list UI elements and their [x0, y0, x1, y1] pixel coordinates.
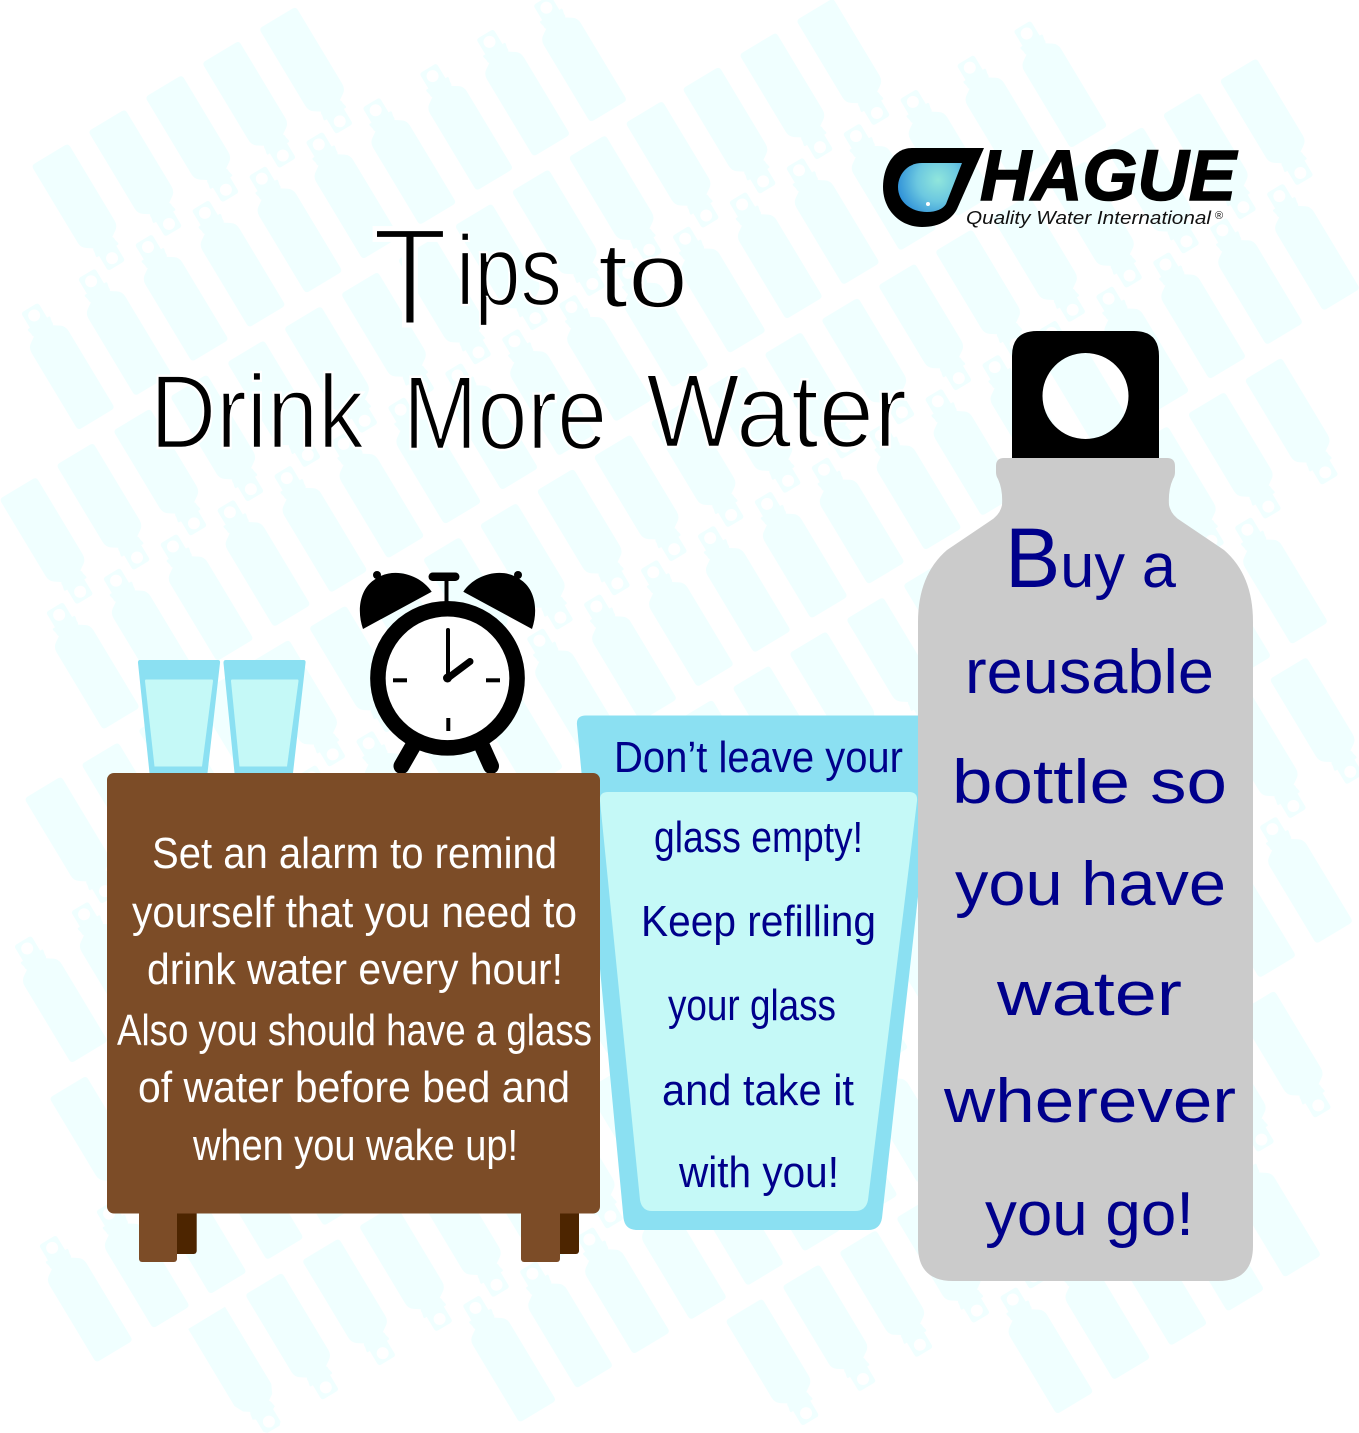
glass tip text: glass empty! [654, 813, 863, 862]
table tip text: of water before bed and [138, 1063, 570, 1112]
icon: two small water glasses [138, 660, 306, 773]
table legs [139, 1205, 579, 1262]
bottle tip text: bottle so [952, 748, 1227, 817]
logo tagline: Quality Water International [966, 208, 1212, 228]
panel: reusable bottle [918, 331, 1253, 1281]
panel: bedside table [107, 773, 600, 1262]
table tip text: Also you should have a glass [117, 1006, 592, 1055]
title [150, 198, 907, 472]
table tip text: Set an alarm to remind [152, 829, 557, 878]
panel: big water glass [577, 716, 938, 1230]
table tip text: yourself that you need to [132, 888, 577, 937]
glass tip text [614, 733, 903, 1197]
title: Water [646, 353, 907, 470]
logo wordmark: HAGUE [980, 137, 1239, 216]
table top [107, 773, 600, 1214]
title: T [372, 198, 448, 355]
bottle tip text [943, 511, 1236, 1249]
glass tip text: and take it [662, 1066, 854, 1115]
title: ips [456, 215, 562, 327]
bottle tip text: wherever [943, 1067, 1236, 1136]
title: More [403, 355, 607, 472]
glass tip text: Don’t leave your [614, 733, 903, 782]
glass tip text: Keep refilling [641, 897, 876, 946]
title: Drink [150, 354, 364, 471]
bottle tip text: you go! [985, 1180, 1194, 1249]
table tip text [117, 829, 592, 1170]
table tip text: when you wake up! [192, 1121, 518, 1170]
bottle tip text: Buy a [1005, 511, 1176, 605]
bottle tip text: you have [955, 850, 1226, 919]
icon: alarm clock [360, 571, 535, 766]
bottle tip text: reusable [965, 638, 1214, 707]
bottle tip text: water [996, 960, 1182, 1029]
glass tip text: with you! [678, 1148, 839, 1197]
title: to [598, 225, 688, 327]
table tip text: drink water every hour! [147, 945, 563, 994]
logo registered mark: ® [1215, 210, 1223, 222]
logo: Hague Quality Water International [883, 137, 1239, 228]
bottle cap [1012, 331, 1159, 460]
icon: logo water drop [883, 148, 984, 227]
glass tip text: your glass [668, 981, 836, 1030]
bottle body [918, 458, 1253, 1281]
